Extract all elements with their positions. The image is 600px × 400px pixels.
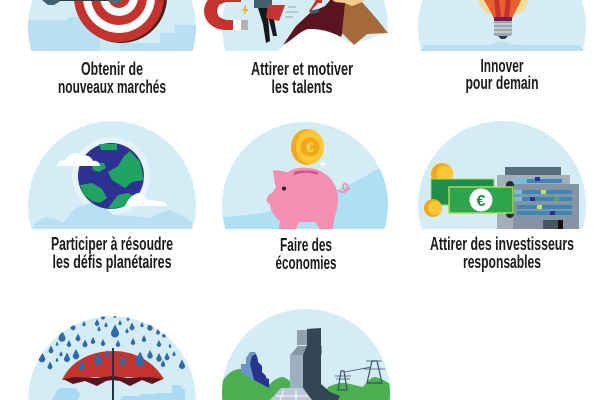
icon: green hills, building and pylons — [222, 309, 390, 400]
icon: globe with clouds — [28, 121, 196, 229]
heading: Faire des — [280, 235, 332, 255]
icon: banknotes, coins and building — [418, 121, 586, 229]
panel: nouveaux marchés — [28, 0, 196, 93]
panel: défis planétaires — [28, 121, 196, 272]
panel: économies — [222, 122, 388, 269]
heading — [276, 235, 336, 273]
heading: Participer à résoudre — [51, 234, 173, 254]
panel: innover — [418, 0, 586, 93]
heading: Obtenir de — [81, 59, 143, 79]
panel: investisseurs — [418, 121, 586, 272]
heading: les talents — [272, 77, 332, 97]
panel: umbrella and rain — [28, 314, 196, 400]
icon: umbrella, rain and city — [28, 314, 196, 400]
heading: responsables — [463, 252, 541, 272]
heading — [251, 59, 353, 97]
icon: magnet, person and mountain — [204, 0, 388, 51]
panel: infrastructure and nature — [222, 309, 390, 400]
heading — [466, 56, 538, 93]
icon: banknotes, coins and building: € — [477, 193, 486, 210]
icon: target over city — [28, 0, 196, 51]
icon: light bulb — [418, 0, 586, 51]
heading: économies — [276, 253, 336, 273]
heading: nouveaux marchés — [58, 77, 166, 97]
heading: les défis planétaires — [52, 252, 172, 272]
panel: talents — [204, 0, 388, 93]
heading — [51, 234, 173, 272]
heading: Innover — [480, 56, 524, 76]
heading: Attirer et motiver — [251, 59, 353, 79]
heading: pour demain — [466, 73, 538, 93]
icon: piggy bank and coin: € — [306, 139, 314, 155]
icon: piggy bank and coin — [222, 122, 388, 229]
heading — [430, 234, 574, 272]
heading — [58, 59, 166, 97]
